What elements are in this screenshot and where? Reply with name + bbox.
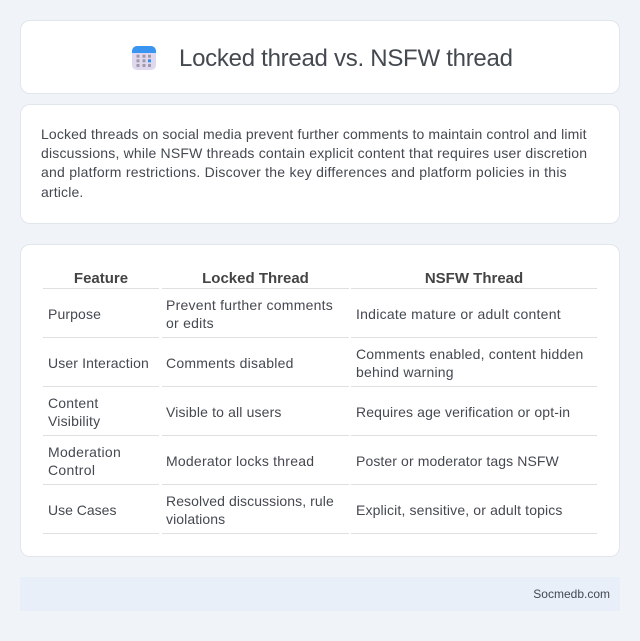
row: Purpose: or edits [166,315,214,331]
column headers: Locked Thread [202,270,309,287]
row: Moderation Control: Control [48,462,95,478]
row: Purpose: Purpose [48,306,101,322]
row: Content Visibility [48,395,570,429]
row: Use Cases: violations [166,511,225,527]
row: Moderation Control: Poster or moderator tags NSFW [356,453,559,469]
intro text: Locked threads on social media prevent further comments to maintain control and limit [41,126,587,142]
row: Purpose: Prevent further comments [166,297,333,313]
row: Moderation Control: Moderator locks thread [166,453,314,469]
row: User Interaction: User Interaction [48,355,149,371]
row: Moderation Control [48,444,559,478]
row: Content Visibility: Visibility [48,413,100,429]
row: Moderation Control: Moderation [48,444,121,460]
intro card [20,104,620,224]
title: Locked thread vs. NSFW thread [179,45,513,72]
comparison table card [20,244,620,557]
row: User Interaction: behind warning [356,364,454,380]
icon: calendar [132,46,156,70]
column headers: Feature [74,270,128,287]
row: Use Cases [48,493,563,527]
footer text: Socmedb.com [533,587,610,601]
column headers [74,270,523,287]
footer bar [20,577,620,611]
row: Use Cases: Resolved discussions, rule [166,493,334,509]
intro text: and platform restrictions. Discover the key differences and platform policies in this [41,164,567,180]
row: User Interaction [48,346,583,380]
row: Purpose: Indicate mature or adult content [356,306,561,322]
column headers: NSFW Thread [425,270,523,287]
row: Use Cases: Use Cases [48,502,116,518]
row: User Interaction: Comments enabled, content hidden [356,346,583,362]
row: Purpose [48,297,561,331]
row: Content Visibility: Visible to all users [166,404,282,420]
intro text [41,126,587,200]
row: Use Cases: Explicit, sensitive, or adult topics [356,502,563,518]
intro text: discussions, while NSFW threads contain explicit content that requires user discretion [41,145,587,161]
row: User Interaction: Comments disabled [166,355,294,371]
header card [20,20,620,94]
intro text: article. [41,184,83,200]
row: Content Visibility: Content [48,395,98,411]
row: Content Visibility: Requires age verification or opt-in [356,404,570,420]
